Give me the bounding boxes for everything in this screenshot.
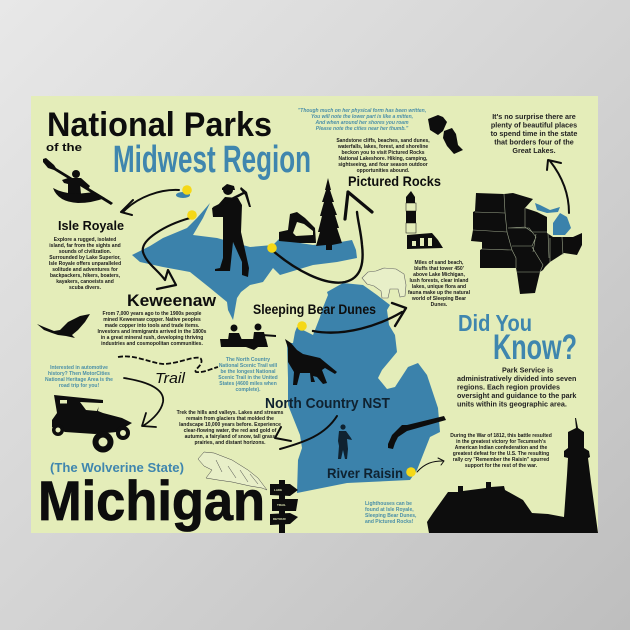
text: north country trail note xyxy=(218,357,278,393)
text: Keweenaw description: in a great mineral rush, developing thriving xyxy=(101,335,203,341)
label: The Wolverine State: (The Wolverine State) xyxy=(50,460,184,475)
icon: pine tree xyxy=(316,178,342,250)
text: Pictured Rocks description: National Lakeshore. Hiking, camping, xyxy=(339,156,428,162)
icon: eagle xyxy=(37,314,90,338)
title: National Parks xyxy=(47,106,272,144)
text: lighthouses note xyxy=(365,501,417,525)
callout: did you know: Did You xyxy=(458,310,532,336)
text: north country trail note: complete). xyxy=(235,387,261,393)
icon: signpost: DETOUR xyxy=(273,517,286,521)
text: Sleeping Bear description: Miles of sand beach, xyxy=(415,260,464,266)
text: Isle Royale description: kayakers, canoeists and xyxy=(56,279,114,285)
text: north country trail note: The North Country xyxy=(226,357,270,363)
text: north country trail note: Scenic Trail in the United xyxy=(218,375,278,381)
text: Sleeping Bear description: lush forests, clear inland xyxy=(410,278,468,284)
text: Keweenaw description xyxy=(98,311,207,347)
text: Isle Royale description: Explore a rugged, isolated xyxy=(54,237,116,243)
marker: Isle Royale xyxy=(182,185,192,195)
text: North Country description xyxy=(177,410,284,446)
icon: signpost: TRAIL xyxy=(277,503,286,507)
label: River Raisin: River Raisin xyxy=(327,465,403,481)
text: Isle Royale description: scuba divers. xyxy=(69,285,102,291)
text: north country trail note: States (4600 miles when xyxy=(219,381,277,387)
text: North Country description: prairies, and distant horizons. xyxy=(194,440,266,446)
arrow: to Keweenaw xyxy=(143,218,190,289)
text: motor cities note: history? Then MotorCities xyxy=(48,371,110,377)
text: North Country description: autumn, a fairyland of snow, tall grass xyxy=(185,434,276,440)
arrow: to Sleeping Bear Dunes text xyxy=(313,303,406,333)
arrow: to North Country text xyxy=(275,416,337,449)
icon: hiker xyxy=(338,424,352,459)
marker: River Raisin xyxy=(406,467,416,477)
label: Keweenaw: Keweenaw xyxy=(127,291,217,310)
text: Park Service note: oversight and guidance to the park xyxy=(457,391,576,400)
text: lighthouses note: and Pictured Rocks! xyxy=(365,519,414,525)
icon: mitten map xyxy=(428,115,463,154)
text: Pictured Rocks description: waterfalls, lakes, forest, and shoreline xyxy=(337,144,428,150)
text: Sleeping Bear description: world of Sleeping Bear xyxy=(411,296,466,302)
icon: forest cabin silhouette xyxy=(279,212,316,243)
text: quote: "Though much on her physical form has been written, xyxy=(298,108,426,114)
label: Sleeping Bear Dunes: Sleeping Bear Dunes xyxy=(253,301,376,317)
map: Michigan lower peninsula xyxy=(287,283,440,493)
marker: Pictured Rocks xyxy=(267,243,277,253)
icon: vintage car xyxy=(52,395,132,452)
text: Keweenaw description: made copper into tools and trade items. xyxy=(105,323,200,329)
icon: howling wolf xyxy=(285,339,337,385)
text: Isle Royale description: backpackers, hikers, boaters, xyxy=(50,273,121,279)
text: Sleeping Bear description: fauna make up the natural xyxy=(408,290,471,296)
callout: did you know xyxy=(458,310,577,367)
path: dashed trail xyxy=(118,356,218,372)
text: Park Service note: administratively divided into seven xyxy=(457,374,576,383)
heading: Midwest Region: Midwest Region xyxy=(113,139,311,181)
text: Keweenaw description: mined Keweenaw copper. Native peoples xyxy=(103,317,201,323)
arrow: to Pictured Rocks xyxy=(272,192,372,283)
text: Isle Royale description xyxy=(49,237,121,291)
poster panel xyxy=(31,96,598,533)
icon: Pictured Rocks lighthouse xyxy=(406,191,443,249)
text: Keweenaw description: Investors and immigrants arrived in the 1800s xyxy=(98,329,207,335)
text: Sleeping Bear description: above Lake Michigan, xyxy=(413,272,465,278)
text: Park Service note: Park Service is xyxy=(502,366,553,374)
text: War of 1812 note xyxy=(450,433,552,469)
text: great lakes note: that borders four of the xyxy=(494,138,574,146)
icon: lighthouse and keeper house silhouette xyxy=(427,418,598,533)
text: North Country description: clear-flowing water, the red and gold of xyxy=(184,428,277,434)
icon: bear outline xyxy=(362,268,406,298)
text: Sleeping Bear description: Dunes. xyxy=(431,302,448,308)
text: quote: And when around her shores you roam xyxy=(314,120,409,126)
text: lighthouses note: Sleeping Bear Dunes, xyxy=(365,513,417,519)
text: Keweenaw description: From 7,000 years ago to the 1900s people xyxy=(103,311,202,317)
text: War of 1812 note: greatest defeat for the U.S. The resulting xyxy=(453,451,549,457)
heading: Michigan: Michigan xyxy=(38,469,265,532)
marker: Keweenaw xyxy=(187,210,197,220)
text: North Country description: remain from glaciers that molded the xyxy=(186,416,274,422)
text: Sleeping Bear description xyxy=(408,260,471,308)
text: north country trail note: be the longest National xyxy=(220,369,276,375)
arrow: to River Raisin text xyxy=(417,458,444,472)
icon: signpost xyxy=(270,480,298,533)
icon: miner xyxy=(212,184,251,277)
text: great lakes note: to spend time in the state xyxy=(491,129,577,138)
text: War of 1812 note: During the War of 1812, this battle resulted xyxy=(450,433,552,439)
text: War of 1812 note: in the greatest victory for Tecumseh's xyxy=(456,439,546,445)
text: Sleeping Bear description: lakes, unique flora and xyxy=(412,284,466,290)
text: Park Service note: units within its geographic area. xyxy=(457,400,567,408)
text: motor cities note: road trip for you! xyxy=(59,383,99,389)
icon: flintlock pistol xyxy=(388,416,446,449)
callout: did you know: Know? xyxy=(493,328,577,367)
map: Michigan on regional map xyxy=(535,203,571,235)
text: Pictured Rocks description xyxy=(336,138,430,174)
icon: kayaker xyxy=(43,158,113,205)
text: Pictured Rocks description: sightseeing, and four season outdoor xyxy=(338,162,428,168)
label: Isle Royale: Isle Royale xyxy=(58,218,124,233)
text: quote: Please note the cities near her thumb." xyxy=(316,126,409,132)
text: motor cities note: Interested in automotive xyxy=(50,365,108,371)
icon: canoe with paddlers xyxy=(220,324,276,350)
map: Isle Royale island xyxy=(176,192,190,198)
text: north country trail note: National Scenic Trail will xyxy=(219,363,278,369)
text: lighthouses note: found at Isle Royale, xyxy=(365,507,414,513)
text: great lakes note xyxy=(491,112,577,155)
icon: signpost: LAKE xyxy=(274,488,282,492)
label: Pictured Rocks: Pictured Rocks xyxy=(348,173,441,189)
text: motor cities note: National Heritage Area is the xyxy=(45,377,113,383)
arrow: trail to car xyxy=(124,378,163,427)
text: quote xyxy=(298,108,426,132)
text: North Country description: Trek the hills and valleys. Lakes and streams xyxy=(177,410,284,416)
arrow: to Michigan on regional map xyxy=(547,160,569,213)
text: Isle Royale description: Isle Royale offers unparalleled xyxy=(49,261,121,267)
text: lighthouses note: Lighthouses can be xyxy=(365,501,412,507)
text: War of 1812 note: rally cry "Remember the Raisin" spurred xyxy=(453,457,549,463)
text: great lakes note: It's no surprise there are xyxy=(492,112,576,121)
icon: wolverine sketch xyxy=(198,452,267,490)
map: Midwest region states xyxy=(471,193,582,294)
text: Pictured Rocks description: opportunities abound. xyxy=(357,168,410,174)
arrow: to Isle Royale xyxy=(121,190,179,215)
label: North Country NST: North Country NST xyxy=(265,395,390,412)
text: Park Service note: regions. Each region provides xyxy=(457,382,560,392)
map: Michigan upper peninsula xyxy=(132,203,357,320)
subtitle: of the: of the xyxy=(46,142,82,154)
text: motor cities note xyxy=(45,365,113,389)
text: Pictured Rocks description: beckon you to visit Pictured Rocks xyxy=(341,150,425,156)
text: quote: You will note the lower part is like a mitten, xyxy=(311,114,413,120)
text: War of 1812 note: support for the rest of the war. xyxy=(465,463,538,469)
text: great lakes note: Great Lakes. xyxy=(512,146,556,155)
text: Park Service note xyxy=(457,366,576,408)
text: Isle Royale description: Surrounded by Lake Superior, xyxy=(49,255,121,261)
text: Keweenaw description: industries and cosmopolitan communities. xyxy=(101,341,203,347)
text: Pictured Rocks description: Sandstone cliffs, beaches, sand dunes, xyxy=(336,138,430,144)
text: Isle Royale description: sounds of civilization. xyxy=(59,249,112,255)
text: great lakes note: plenty of beautiful places xyxy=(491,120,577,130)
text: Isle Royale description: solitude and adventures for xyxy=(52,267,118,273)
text: Sleeping Bear description: bluffs that tower 450' xyxy=(414,266,464,272)
text: Isle Royale description: island, far from the sights and xyxy=(49,243,121,249)
text: North Country description: landscape 10,000 years before. Experience xyxy=(179,422,281,428)
label: Trail: Trail xyxy=(155,370,186,387)
marker: Sleeping Bear Dunes xyxy=(297,321,307,331)
text: War of 1812 note: American Indian confederation and the xyxy=(455,445,547,451)
